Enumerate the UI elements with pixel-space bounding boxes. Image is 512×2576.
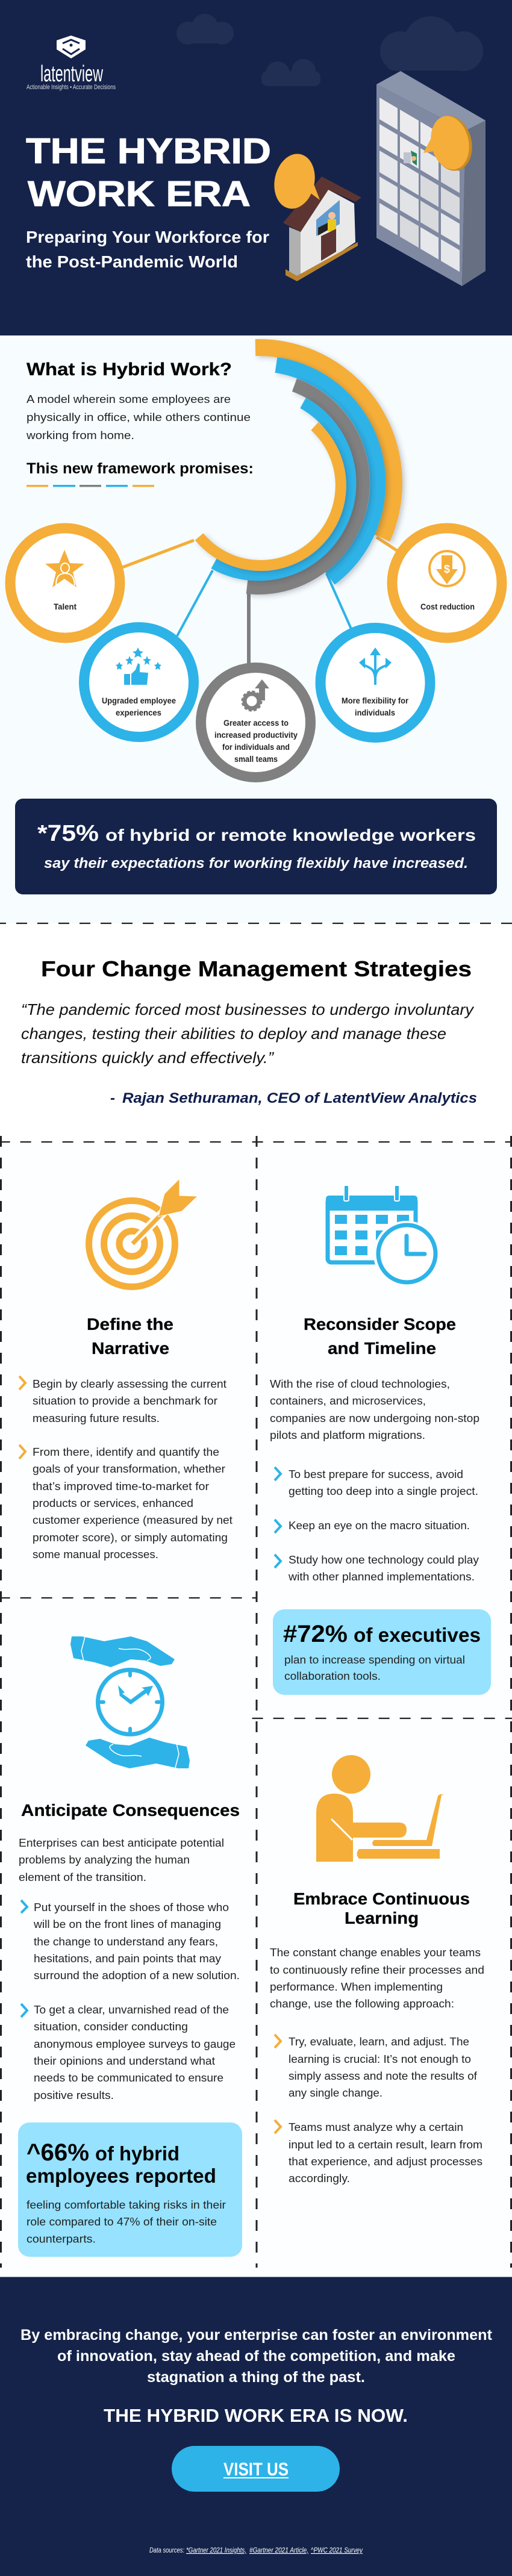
data sources: Data sources: (149, 2546, 184, 2554)
bullet two: some manual processes. (33, 1548, 158, 1561)
bullet one: will be on the front lines of managing (33, 1918, 221, 1930)
icon: down arrow dollar: $ (444, 563, 450, 575)
logo: Actionable Insights • Accurate Decisions (27, 84, 116, 91)
quote: changes, testing their abilities to deploy and manage these (21, 1024, 446, 1043)
bullet one: hesitations, and pain points that may (34, 1953, 221, 1965)
circle: greater access: small teams (234, 754, 278, 764)
bullet two: input led to a certain result, learn from (289, 2139, 482, 2151)
bullet one: learning is crucial: It’s not enough to (289, 2053, 471, 2065)
stat callout: 72%: collaboration tools. (284, 1670, 381, 1682)
logo: latentview (40, 61, 103, 87)
bullet one: Try, evaluate, learn, and adjust. The (289, 2036, 469, 2048)
hero section (0, 0, 512, 335)
bullet one: measuring future results. (33, 1412, 160, 1424)
clouds (176, 14, 483, 86)
office speech bubble (423, 112, 477, 175)
heading: and Timeline (328, 1339, 436, 1358)
button: visit us (172, 2446, 340, 2492)
bullet one: the change to understand any fears, (34, 1936, 218, 1948)
subheading: This new framework promises: (27, 460, 254, 477)
bullet two: that’s improved time-to-market for (33, 1480, 209, 1492)
bullet three: Study how one technology could play (289, 1554, 479, 1566)
bullet two: needs to be communicated to ensure (34, 2072, 223, 2084)
section: what is hybrid work (0, 335, 512, 923)
icon: gear with arrow (242, 679, 269, 711)
stat callout: 72% (273, 1609, 491, 1695)
stat callout: 66%: employees reported (26, 2165, 216, 2187)
intro text: to continuously refine their processes and (270, 1964, 484, 1976)
bullet two: From there, identify and quantify the (33, 1446, 219, 1458)
stat callout: 66%: ^66% (27, 2139, 89, 2166)
bullet two: situation, consider conducting (34, 2021, 188, 2033)
bullet one (21, 1900, 240, 1982)
bullet two: Teams must analyze why a certain (289, 2121, 463, 2133)
stat callout: 66% (18, 2122, 242, 2257)
concentric arcs (199, 348, 394, 588)
bullet three: with other planned implementations. (288, 1571, 475, 1583)
heading: Learning (345, 1909, 419, 1927)
intro text: element of the transition. (19, 1871, 146, 1883)
bullet two (21, 2004, 236, 2101)
bullet two: customer experience (measured by net (33, 1514, 233, 1526)
closing text: By embracing change, your enterprise can foster an environment (20, 2327, 493, 2344)
heading (293, 1889, 470, 1927)
circle: talent: Talent (54, 602, 76, 611)
heading: Define the (87, 1315, 173, 1333)
stat banner: say their expectations for working flexibly have increased. (44, 855, 468, 872)
bullet three (275, 1554, 479, 1583)
bullet two: goals of your transformation, whether (33, 1463, 225, 1475)
bullet two: promoter score), or simply automating (33, 1532, 228, 1544)
stat callout: 66%: of hybrid (95, 2142, 180, 2165)
logo (27, 36, 116, 91)
footer (0, 2277, 512, 2576)
stat callout: 66%: role compared to 47% of their on-site (27, 2216, 217, 2228)
heading (87, 1315, 173, 1358)
intro text (270, 1378, 479, 1441)
circle: more flexibility: More flexibility for (342, 696, 409, 705)
card: embrace continuous learning (270, 1755, 484, 2185)
circle: upgraded employee experiences: Upgraded employee (102, 696, 176, 705)
closing text: of innovation, stay ahead of the competition, and make (57, 2348, 455, 2365)
icon: star person (45, 550, 84, 587)
intro text: companies are now undergoing non-stop (270, 1412, 479, 1424)
icon: thumbs up with stars (116, 647, 161, 685)
icon: branching arrows (359, 647, 392, 685)
bullet one: Put yourself in the shoes of those who (34, 1901, 229, 1913)
stat callout: 72%: of executives (354, 1624, 481, 1646)
quote: “The pandemic forced most businesses to undergo involuntary (21, 1000, 475, 1018)
house windows and worker (316, 200, 340, 236)
icon: hands holding clock (70, 1636, 190, 1768)
card: reconsider scope and timeline (270, 1185, 491, 1695)
bullet one: surround the adoption of a new solution. (34, 1969, 240, 1982)
heading (304, 1315, 456, 1358)
subtitle: the Post-Pandemic World (26, 252, 238, 271)
circle: cost reduction: Cost reduction (420, 602, 475, 611)
stat callout: 72%: #72% (283, 1621, 348, 1647)
circle: greater access: Greater access to (223, 718, 289, 728)
button: visit us: VISIT US (223, 2459, 289, 2480)
subtitle (26, 228, 269, 271)
circle: greater access: for individuals and (222, 742, 290, 752)
bullet two: Keep an eye on the macro situation. (289, 1520, 470, 1532)
house illustration (269, 150, 361, 281)
heading: What is Hybrid Work? (27, 360, 232, 379)
bullet one: simply assess and note the results of (289, 2070, 478, 2082)
quote (21, 1000, 475, 1067)
stat banner: of hybrid or remote knowledge workers (105, 826, 476, 844)
stat banner (15, 799, 497, 894)
stat banner: *75% (37, 821, 99, 846)
circle: upgraded employee experiences (84, 628, 194, 737)
data sources: ^PWC 2021 Survey (311, 2546, 363, 2554)
heading: Reconsider Scope (304, 1315, 456, 1333)
bullet two: anonymous employee surveys to gauge (34, 2038, 236, 2050)
title: THE HYBRID (26, 131, 271, 171)
house speech bubble (269, 150, 320, 213)
office building illustration (376, 71, 485, 286)
quote attribution: - (110, 1090, 115, 1106)
definition text: working from home. (26, 429, 134, 441)
heading: Anticipate Consequences (21, 1801, 240, 1820)
card: anticipate consequences (18, 1636, 242, 2257)
data sources: #Gartner 2021 Article, (249, 2546, 308, 2554)
intro text: problems by analyzing the human (19, 1854, 190, 1866)
definition text: physically in office, while others continue (27, 411, 251, 423)
intro text: pilots and platform migrations. (270, 1429, 425, 1441)
closing text: stagnation a thing of the past. (147, 2369, 365, 2386)
stat callout: 66%: counterparts. (27, 2233, 96, 2245)
heading: Embrace Continuous (293, 1889, 470, 1908)
data sources: *Gartner 2021 Insights, (186, 2546, 246, 2554)
intro text: containers, and microservices, (270, 1395, 426, 1407)
strategies grid (0, 1136, 512, 2277)
bullet one (275, 2035, 478, 2099)
intro text: Enterprises can best anticipate potential (19, 1837, 224, 1849)
call to action heading: THE HYBRID WORK ERA IS NOW. (104, 2405, 408, 2426)
quote: transitions quickly and effectively.” (21, 1049, 274, 1067)
circle: more flexibility (320, 628, 430, 737)
circle: upgraded employee experiences: experiences (116, 708, 161, 717)
bullet two (275, 2120, 482, 2185)
intro text (19, 1837, 224, 1883)
definition text: A model wherein some employees are (27, 393, 231, 405)
closing text (20, 2327, 493, 2386)
bullet two: products or services, enhanced (33, 1497, 193, 1509)
bullet two: that experience, and adjust processes (289, 2156, 482, 2168)
stat callout: 72%: plan to increase spending on virtual (284, 1654, 465, 1666)
circle: greater access: increased productivity (214, 730, 298, 740)
bullet one: To best prepare for success, avoid (289, 1468, 463, 1480)
icon: down arrow dollar (429, 551, 464, 586)
bullet one: Begin by clearly assessing the current (33, 1378, 226, 1390)
icon: calendar and clock (326, 1185, 440, 1287)
intro text: With the rise of cloud technologies, (270, 1378, 450, 1390)
bullet two: positive results. (34, 2089, 114, 2101)
intro text: The constant change enables your teams (270, 1947, 481, 1959)
intro text: performance. When implementing (270, 1981, 443, 1993)
icon: target with arrow (89, 1179, 198, 1286)
bullet one: situation to provide a benchmark for (33, 1395, 217, 1407)
connector lines (122, 537, 402, 664)
office worker (404, 151, 417, 166)
circle: greater access (201, 667, 311, 777)
card: define the narrative (19, 1179, 233, 1561)
definition text (26, 393, 251, 441)
title: WORK ERA (28, 174, 251, 214)
bullet two: To get a clear, unvarnished read of the (34, 2004, 229, 2016)
bullet one (19, 1376, 226, 1424)
bullet one (275, 1467, 478, 1497)
circle: talent (10, 528, 120, 638)
subtitle: Preparing Your Workforce for (26, 228, 269, 246)
circle: more flexibility: individuals (355, 708, 395, 717)
bullet one: any single change. (289, 2087, 382, 2099)
bullet one: getting too deep into a single project. (289, 1485, 478, 1497)
stat callout: 66%: feeling comfortable taking risks in their (27, 2199, 226, 2211)
bullet two (19, 1445, 233, 1561)
data sources (149, 2546, 363, 2554)
icon: person at laptop (316, 1755, 444, 1862)
intro text: change, use the following approach: (270, 1998, 454, 2010)
circle: cost reduction (392, 528, 502, 638)
heading: Narrative (92, 1339, 169, 1358)
bullet two: accordingly. (289, 2172, 350, 2185)
section heading: four change management strategies: Four Change Management Strategies (41, 956, 472, 981)
title (26, 131, 271, 214)
quote attribution: Rajan Sethuraman, CEO of LatentView Analytics (122, 1090, 477, 1106)
intro text (270, 1947, 484, 2010)
colour bars (27, 485, 154, 487)
bullet two: their opinions and understand what (34, 2055, 215, 2067)
